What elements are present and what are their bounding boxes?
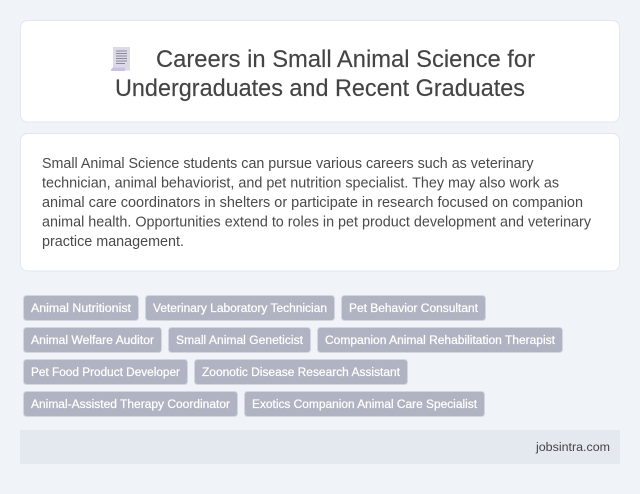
text block: description: technician, animal behaviorist, and pet nutrition specialist. They may also work as [42,176,559,192]
icon: paper scroll [111,47,130,71]
tag: Veterinary Laboratory Technician [146,296,334,320]
text block: description: animal health. Opportunities extend to roles in pet product development and veterinary [42,214,592,230]
text block: description: practice management. [42,234,184,250]
tag: Animal-Assisted Therapy Coordinator: Animal-Assisted Therapy Coordinator [31,397,230,411]
tag: Zoonotic Disease Research Assistant [194,360,408,384]
tag: Exotics Companion Animal Care Specialist: Exotics Companion Animal Care Specialist [252,397,478,411]
tag: Companion Animal Rehabilitation Therapist: Companion Animal Rehabilitation Therapist [325,333,556,347]
tag: Animal Nutritionist [24,296,138,320]
footer source text: jobsintra.com [535,440,610,454]
text block: description [42,156,592,250]
footer bar [20,430,620,464]
tag: Pet Food Product Developer [24,360,188,384]
tag: Pet Food Product Developer: Pet Food Product Developer [31,365,180,379]
title: Careers in Small Animal Science for [156,46,535,73]
tag: Animal Nutritionist: Animal Nutritionist [31,301,132,315]
tag list: related careers [24,296,562,416]
tag: Veterinary Laboratory Technician: Veterinary Laboratory Technician [153,301,327,315]
tag: Pet Behavior Consultant [342,296,486,320]
title [115,46,535,102]
tag: Zoonotic Disease Research Assistant: Zoonotic Disease Research Assistant [202,365,401,379]
tag: Small Animal Geneticist [168,328,310,352]
tag: Animal Welfare Auditor: Animal Welfare Auditor [31,333,154,347]
panel: title header [20,20,620,122]
tag: Animal Welfare Auditor [24,328,162,352]
tag: Companion Animal Rehabilitation Therapist [318,328,562,352]
text block: description: animal care coordinators in shelters or participate in research focused on companion [42,195,583,211]
panel: description [20,134,620,271]
tag: Pet Behavior Consultant: Pet Behavior Consultant [349,301,479,315]
title: Undergraduates and Recent Graduates [115,75,525,102]
tag: Exotics Companion Animal Care Specialist [244,392,484,416]
text block: description: Small Animal Science students can pursue various careers such as veterinary [42,156,534,172]
tag: Small Animal Geneticist: Small Animal Geneticist [176,333,304,347]
tag: Animal-Assisted Therapy Coordinator [24,392,238,416]
